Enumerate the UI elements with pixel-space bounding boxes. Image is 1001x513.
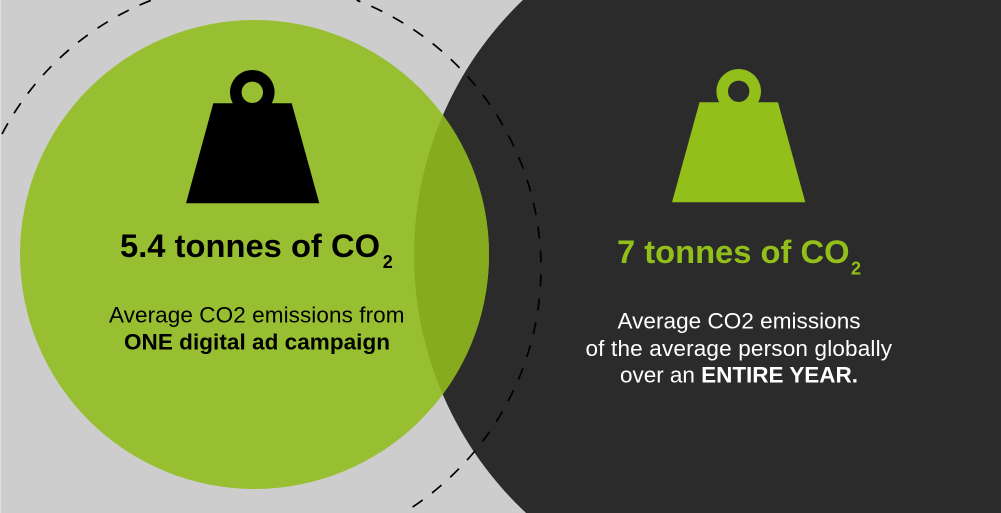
heading: 7 tonnes of CO2: 2 [851, 258, 861, 278]
icon: green weight [672, 69, 805, 202]
text: left description [109, 303, 404, 355]
text: left description: ONE digital ad campaign [124, 330, 390, 355]
text: right description: Average CO2 emissions [618, 309, 860, 334]
icon: black weight [186, 70, 319, 203]
circle overlap [414, 115, 489, 394]
text: right description: over an ENTIRE YEAR. [620, 363, 858, 388]
dashed orbit circle [2, 0, 541, 507]
heading: 7 tonnes of CO2: 7 tonnes of CO [617, 233, 850, 270]
text: left description: Average CO2 emissions from [109, 303, 404, 328]
text: right description [586, 309, 893, 388]
heading: 5.4 tonnes of CO2: 2 [383, 252, 393, 272]
dark circle [414, 0, 1001, 513]
text: right description: of the average person globally [586, 336, 893, 361]
heading: 5.4 tonnes of CO2: 5.4 tonnes of CO [120, 227, 380, 264]
green circle [20, 20, 489, 489]
